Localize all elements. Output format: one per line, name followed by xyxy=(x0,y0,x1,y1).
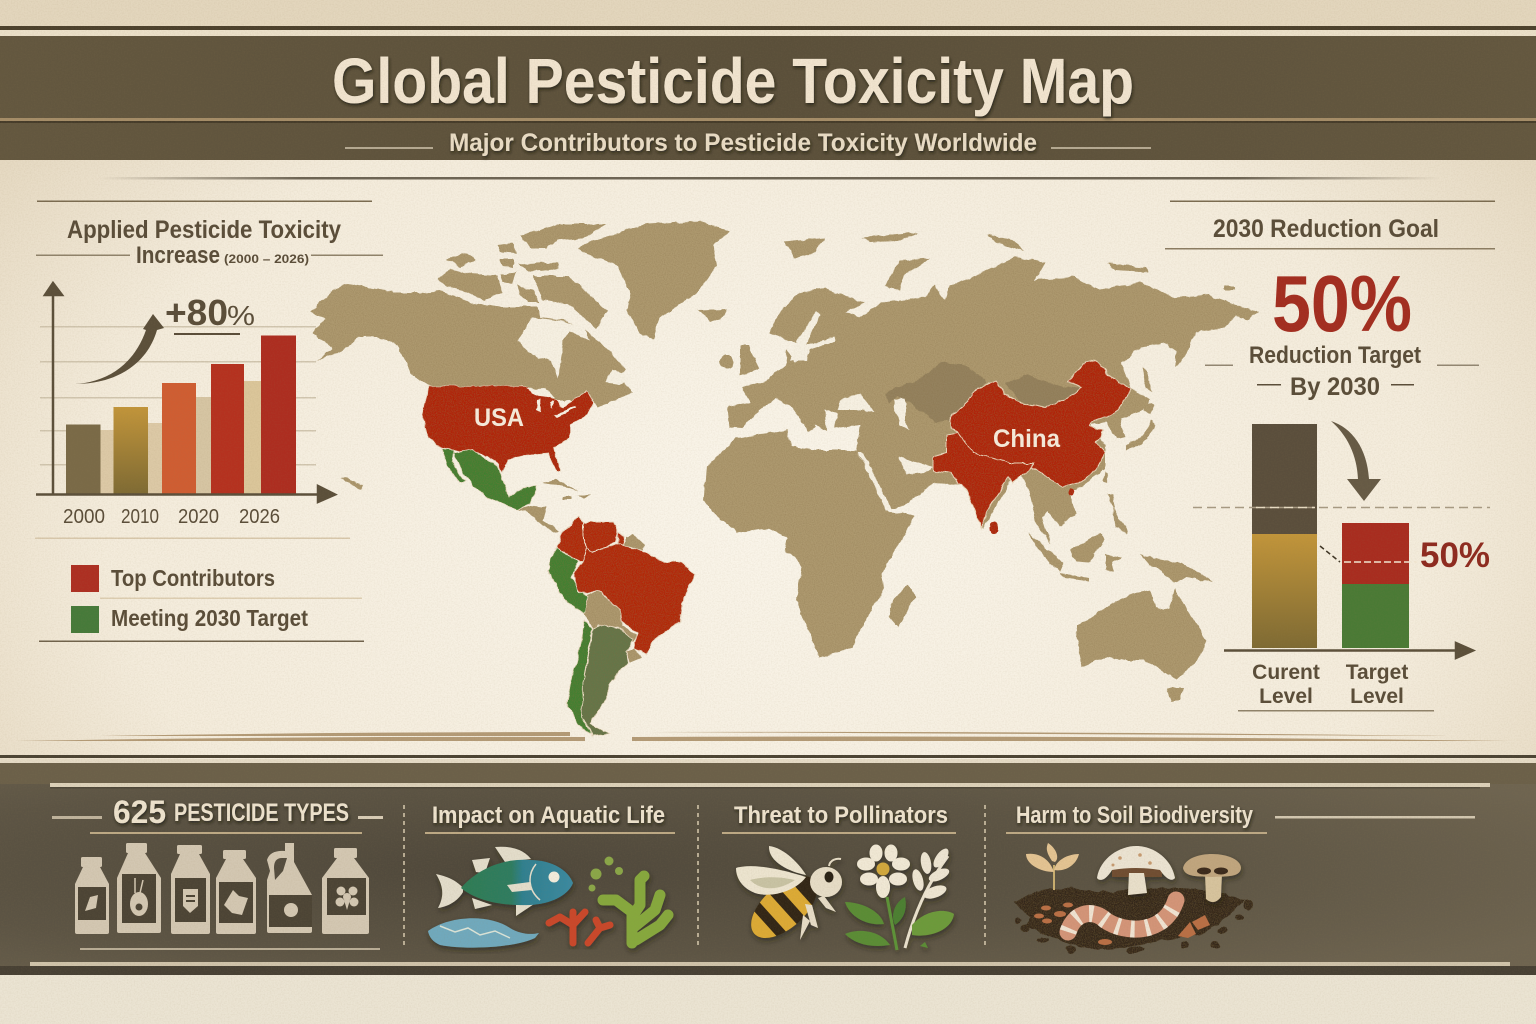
heading: applied pesticide toxicity: Increase xyxy=(136,242,220,269)
bar labels: Target xyxy=(1346,661,1408,684)
panel: 2030 reduction goal xyxy=(1165,200,1495,712)
legend xyxy=(71,565,362,633)
+80% callout: % xyxy=(227,300,255,331)
panel: toxicity increase chart xyxy=(35,200,383,642)
header banner xyxy=(0,26,1536,180)
map: USA top contributor xyxy=(422,386,593,472)
50 percent label: 50% xyxy=(1420,536,1490,575)
icon: bottle 1 xyxy=(75,857,109,934)
icon: soil stones xyxy=(1034,902,1210,945)
map: China and India xyxy=(933,360,1131,534)
heading: 625 pesticide types: 625 xyxy=(113,794,166,830)
label: USA: USA xyxy=(474,404,524,432)
legend: Top Contributors xyxy=(111,565,275,591)
map: Great Lakes xyxy=(525,388,576,418)
legend: Meeting 2030 Target xyxy=(111,605,308,631)
baseline arrow xyxy=(1224,643,1473,658)
down arrow xyxy=(1331,421,1381,501)
icon: seaweed xyxy=(603,876,668,943)
year labels xyxy=(63,506,280,528)
year labels: 2010 xyxy=(121,506,159,528)
icon: leafy sprig xyxy=(905,846,954,948)
heading: applied pesticide toxicity: Applied Pesticide Toxicity xyxy=(67,216,341,244)
map: inland seas and bays xyxy=(518,312,933,510)
reduction target caption: Reduction Target xyxy=(1249,342,1421,369)
icon: bottle 6 xyxy=(322,848,369,934)
icon: jug xyxy=(267,843,312,933)
heading: 2030 reduction goal: 2030 Reduction Goal xyxy=(1213,215,1439,243)
+80% callout: +80 xyxy=(165,292,228,333)
icon: bee xyxy=(736,846,842,953)
world map xyxy=(310,221,1258,736)
icon: soil mound xyxy=(1014,888,1253,954)
icon: pesticide bottles xyxy=(75,843,369,934)
bar chart xyxy=(36,283,335,528)
heading: applied pesticide toxicity xyxy=(67,216,341,269)
icon: seedling xyxy=(1026,843,1079,890)
year labels: 2026 xyxy=(239,506,280,528)
section: harm to soil biodiversity xyxy=(1006,802,1475,954)
map: tan land masses xyxy=(310,221,1258,702)
heading: impact on aquatic life: Impact on Aquatic Life xyxy=(432,802,665,829)
heading: 625 pesticide types xyxy=(113,794,349,830)
panel: impacts footer xyxy=(0,755,1536,975)
section: impact on aquatic life xyxy=(425,802,675,948)
big 50 percent figure: 50% xyxy=(1272,259,1412,348)
year labels: 2020 xyxy=(178,506,219,528)
icon: brown mushroom xyxy=(1183,854,1241,902)
icon: white mushroom xyxy=(1097,846,1175,895)
bee body xyxy=(750,876,818,944)
heading: harm to soil biodiversity: Harm to Soil Biodiversity xyxy=(1016,802,1254,829)
bar labels: Curent xyxy=(1252,661,1320,684)
icon: lower fish xyxy=(428,918,539,948)
title: Global Pesticide Toxicity Map xyxy=(332,45,1134,117)
icon: red coral xyxy=(549,912,610,943)
stacked comparison bars xyxy=(1193,421,1490,708)
heading: threat to pollinators: Threat to Pollinators xyxy=(734,802,948,829)
icon: flower xyxy=(845,844,910,950)
section: 625 pesticide types xyxy=(52,794,383,950)
heading: applied pesticide toxicity: (2000 – 2026) xyxy=(224,252,309,266)
icon: bottle 2 xyxy=(117,843,161,933)
year labels: 2000 xyxy=(63,506,105,528)
reduction target caption: By 2030 xyxy=(1290,373,1380,401)
icon: teal fish xyxy=(436,847,573,916)
label: China: China xyxy=(993,425,1061,453)
map: darker Central Asia and Mongolia xyxy=(885,363,1082,422)
subtitle: Major Contributors to Pesticide Toxicity Worldwide xyxy=(449,129,1037,157)
heading: 625 pesticide types: PESTICIDE TYPES xyxy=(174,799,349,827)
map: green countries meeting target xyxy=(442,448,593,736)
map: South America top contributors xyxy=(557,517,696,655)
icon: bottle 3 xyxy=(171,845,210,934)
icon: bottle 4 xyxy=(216,850,256,934)
map: Argentina xyxy=(582,624,633,736)
growth arrow xyxy=(75,314,164,384)
bar labels: Level xyxy=(1350,685,1404,708)
x axis xyxy=(36,486,335,502)
bar labels: Level xyxy=(1259,685,1313,708)
icon: bubbles xyxy=(588,856,623,892)
section: threat to pollinators xyxy=(722,802,956,953)
y axis xyxy=(45,283,62,494)
bar labels xyxy=(1252,661,1408,708)
icon: earthworm xyxy=(1068,900,1176,932)
reduction target caption xyxy=(1205,342,1479,401)
+80% callout xyxy=(165,292,255,335)
